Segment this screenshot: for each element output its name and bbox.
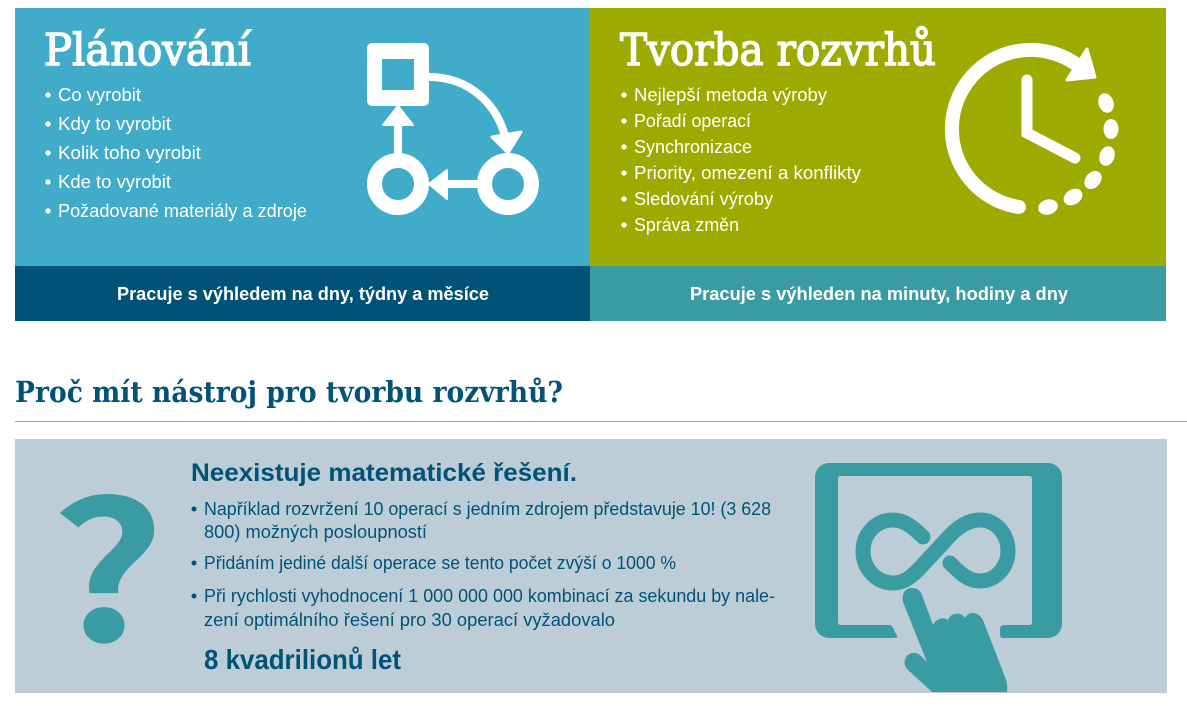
- footer bar: tvorba rozvrhů: [590, 266, 1166, 321]
- text block: body: Při rychlosti vyhodnocení 1 000 000 000 kombinací za sekundu by nale-: [204, 586, 775, 606]
- footer bar: plánování: Pracuje s výhledem na dny, týdny a měsíce: [117, 284, 489, 304]
- heading: tvorba rozvrhů: Tvorba rozvrhů: [620, 25, 936, 76]
- icon: tablet with infinity: [815, 463, 1062, 692]
- list: plánování: Kdy to vyrobit: [58, 114, 171, 134]
- heading: plánování: Plánování: [44, 25, 252, 76]
- text block: body: Přidáním jediné další operace se tento počet zvýší o 1000 %: [204, 553, 676, 573]
- icon: question mark: ?: [50, 421, 165, 696]
- panel: plánování: [15, 8, 590, 266]
- list: tvorba rozvrhů: Pořadí operací: [634, 111, 751, 131]
- callout: 8 kvadrilionů let: 8 kvadrilionů let: [204, 644, 401, 675]
- icon: process cycle: [367, 43, 532, 208]
- text block: body: [192, 499, 775, 630]
- list: plánování: Kolik toho vyrobit: [58, 143, 201, 163]
- panel: tvorba rozvrhů: [590, 8, 1166, 266]
- footer bar: plánování: [15, 266, 590, 321]
- list: tvorba rozvrhů: Synchronizace: [634, 137, 752, 157]
- list: tvorba rozvrhů: Nejlepší metoda výroby: [634, 85, 827, 105]
- list: plánování: Co vyrobit: [58, 85, 141, 105]
- list: tvorba rozvrhů: Sledování výroby: [634, 189, 773, 209]
- text block: body: 800) možných posloupností: [204, 522, 427, 542]
- footer bar: tvorba rozvrhů: Pracuje s výhleden na minuty, hodiny a dny: [690, 284, 1068, 304]
- section heading: Proč mít nástroj pro tvorbu rozvrhů?: [15, 375, 563, 409]
- icon: clock: [952, 49, 1118, 217]
- list: tvorba rozvrhů: [621, 85, 861, 235]
- list: tvorba rozvrhů: Priority, omezení a konflikty: [634, 163, 861, 183]
- list: plánování: Kde to vyrobit: [58, 172, 171, 192]
- text block: body: Například rozvržení 10 operací s jedním zdrojem představuje 10! (3 628: [204, 499, 771, 519]
- subheading: Neexistuje matematické řešení.: [191, 459, 577, 487]
- panel: proč: [15, 421, 1167, 696]
- list: tvorba rozvrhů: Správa změn: [634, 215, 739, 235]
- list: plánování: [45, 85, 307, 221]
- list: plánování: Požadované materiály a zdroje: [58, 201, 307, 221]
- text block: body: zení optimálního řešení pro 30 operací vyžadovalo: [204, 610, 615, 630]
